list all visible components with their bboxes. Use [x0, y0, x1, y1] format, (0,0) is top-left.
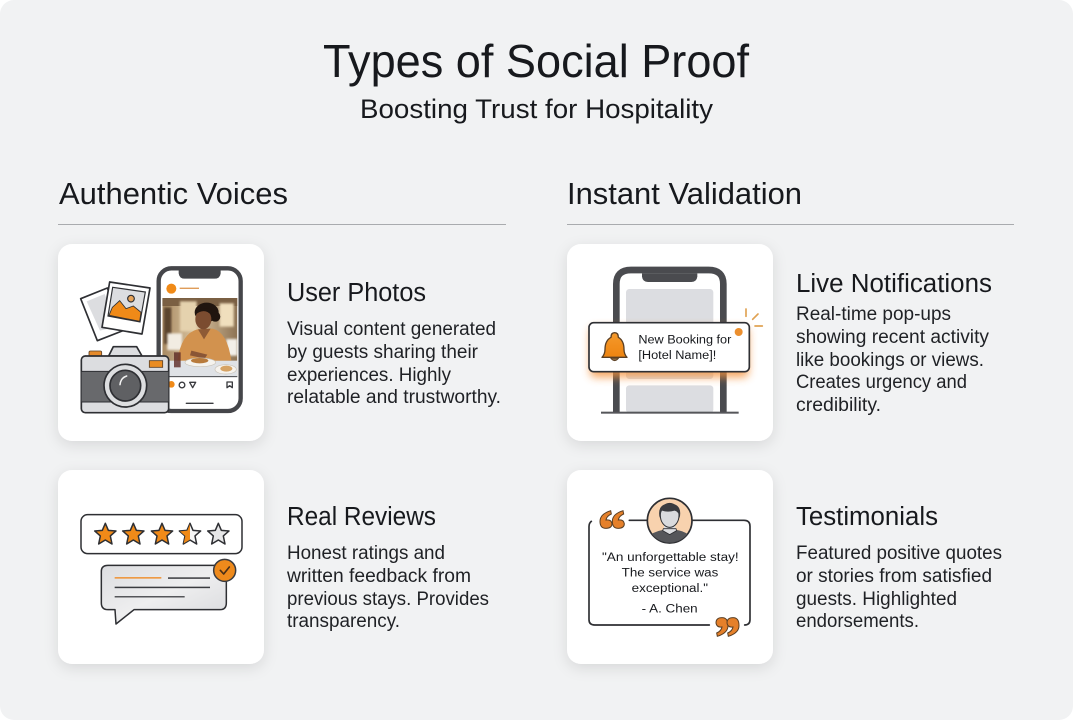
quote text: - A. Chen — [642, 601, 698, 615]
text block: Live Notifications: Live Notifications — [796, 270, 992, 298]
text block: Live Notifications: showing recent activity — [796, 327, 989, 348]
icon: phone notification — [589, 270, 762, 414]
photo: guest dining — [162, 298, 237, 377]
icon: avatar — [646, 498, 693, 544]
icon: front polaroid — [102, 282, 150, 334]
text block: Testimonials: or stories from satisfied — [796, 566, 992, 587]
text block: Testimonials: Featured positive quotes — [796, 543, 1002, 564]
notification dot — [735, 328, 743, 336]
heading: Authentic Voices: Authentic Voices — [59, 177, 288, 211]
quote text — [602, 550, 739, 615]
text block: User Photos — [287, 279, 501, 408]
icon: phone with guest photo — [159, 268, 241, 411]
text block: Real Reviews — [286, 503, 489, 632]
card: testimonials icon — [567, 470, 773, 664]
text block: Real Reviews: previous stays. Provides — [287, 589, 489, 610]
card: user photos icon — [58, 244, 264, 441]
text block: Real Reviews: Honest ratings and — [287, 543, 445, 564]
icon: check badge — [214, 559, 236, 581]
icon: phone — [601, 270, 739, 414]
icon: closing quote mark — [716, 618, 739, 636]
text block: Live Notifications: Real-time pop-ups — [796, 304, 951, 325]
text block: Real Reviews: Real Reviews — [287, 503, 436, 531]
quote text: exceptional." — [632, 581, 708, 595]
subtitle: Boosting Trust for Hospitality — [360, 94, 714, 124]
text block: User Photos: experiences. Highly — [287, 365, 451, 386]
heading: Instant Validation: Instant Validation — [567, 177, 802, 211]
card: real reviews icon — [58, 470, 264, 664]
text block: Real Reviews: transparency. — [287, 611, 400, 632]
text block: User Photos: Visual content generated — [287, 319, 496, 340]
text block: Testimonials: guests. Highlighted — [796, 589, 957, 610]
card: live notifications icon — [567, 244, 773, 441]
text block: Testimonials: endorsements. — [796, 611, 919, 632]
icon: stars — [95, 523, 229, 544]
notification glow — [590, 327, 749, 377]
icon: camera — [81, 347, 169, 413]
text block: Live Notifications: Creates urgency and — [796, 372, 967, 393]
text block: Testimonials — [796, 503, 1002, 632]
panel: Real Reviews — [58, 470, 489, 664]
notification text: New Booking for — [638, 333, 731, 347]
text block: User Photos: relatable and trustworthy. — [287, 387, 501, 408]
icon: testimonial quote — [589, 498, 750, 636]
text block: Live Notifications: like bookings or views. — [796, 350, 984, 371]
icon: back polaroid — [81, 288, 125, 341]
quote text: The service was — [622, 565, 718, 579]
text block: Live Notifications — [796, 270, 992, 416]
panel: User Photos — [58, 244, 501, 441]
notification card — [589, 323, 749, 372]
icon: photos, phone and camera — [81, 268, 241, 413]
title: Types of Social Proof — [323, 35, 749, 87]
text block: User Photos: User Photos — [287, 279, 426, 307]
icon: opening quote mark — [600, 511, 624, 528]
text block: Testimonials: Testimonials — [796, 503, 938, 531]
panel: Testimonials — [567, 470, 1002, 664]
text block: User Photos: by guests sharing their — [287, 342, 479, 363]
quote text: "An unforgettable stay! — [602, 550, 739, 564]
icon: speech bubble — [101, 565, 226, 624]
notification text: [Hotel Name]! — [638, 348, 716, 362]
panel: Live Notifications — [567, 244, 992, 441]
icon: stars and review bubble — [81, 515, 242, 624]
sparkle marks — [746, 309, 762, 326]
notification text — [638, 333, 731, 362]
quote frame — [589, 520, 750, 625]
text block: Real Reviews: written feedback from — [286, 566, 471, 587]
review lines — [115, 577, 210, 597]
icon: bell — [602, 333, 627, 361]
rating bar — [81, 515, 242, 554]
text block: Live Notifications: credibility. — [796, 395, 881, 416]
